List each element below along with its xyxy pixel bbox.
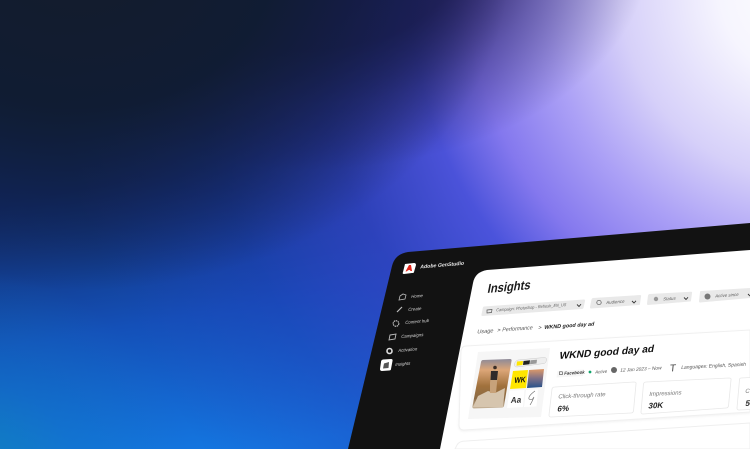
metric: cut-off third card	[737, 378, 750, 410]
breadcrumb: Usage	[477, 328, 494, 335]
metric: cut-off third card: C	[745, 389, 750, 395]
panel: white content area	[440, 250, 750, 449]
metric: click-through rate	[549, 382, 636, 417]
filter: status: Status	[663, 296, 677, 301]
active status	[589, 369, 608, 374]
metric: impressions: Impressions	[649, 390, 682, 398]
ad metadata row	[556, 362, 747, 378]
icon: Adobe logo	[403, 263, 416, 274]
metric: click-through rate: 6%	[557, 404, 570, 413]
breadcrumb	[477, 322, 595, 335]
color palette pill	[514, 358, 547, 367]
languages: Languages: English, Spanish	[681, 362, 747, 371]
filter: campaign: Campaign: Photoshop - Refresh_EN_US	[496, 302, 567, 313]
panel: dark app shell	[348, 223, 750, 449]
ad asset collage	[468, 348, 550, 419]
landscape thumbnail	[527, 369, 544, 388]
breadcrumb: >	[497, 328, 502, 334]
filter: audience: Audience	[606, 299, 626, 305]
ad title: WKND good day ad	[558, 344, 655, 362]
filter: active since	[699, 288, 750, 302]
active status: Active	[595, 369, 608, 374]
facebook tag	[556, 370, 586, 378]
metric: impressions	[641, 378, 731, 414]
filter: active since: Active since	[715, 292, 740, 298]
languages	[669, 362, 747, 374]
breadcrumb: Performance	[502, 325, 533, 334]
panel: next card cut off	[455, 423, 750, 449]
navigation menu	[380, 293, 430, 371]
typography tile: Aa	[510, 394, 522, 405]
collage background	[468, 348, 550, 419]
filter: audience	[590, 295, 641, 308]
nav item: Activation: Activation	[398, 346, 418, 353]
filter: status	[647, 292, 692, 305]
nav item: Campaigns: Campaigns	[401, 332, 425, 339]
main photo: hiker	[472, 359, 512, 408]
product name: Adobe GenStudio	[420, 261, 465, 270]
breadcrumb: >	[538, 325, 543, 331]
nav item: Home: Home	[411, 293, 424, 299]
nav item: Content hub: Content hub	[405, 318, 430, 325]
start date: 12 Jan 2023 – Now	[620, 365, 663, 374]
WK yellow tile: WK	[514, 375, 527, 385]
metric: impressions: 30K	[648, 401, 664, 410]
signature tile	[524, 390, 538, 407]
heading: Insights: Insights	[486, 277, 532, 296]
panel: ad summary card	[459, 330, 750, 430]
facebook tag: Facebook	[564, 370, 586, 376]
filter: campaign	[481, 300, 585, 316]
breadcrumb: WKND good day ad	[544, 322, 595, 331]
nav item: Create: Create	[408, 306, 422, 312]
logo and product name	[403, 261, 465, 274]
filter chips	[481, 288, 750, 316]
nav item: Insights active: Insights	[395, 361, 412, 367]
languages: T	[669, 363, 676, 374]
metric: click-through rate: Click-through rate	[558, 392, 607, 400]
